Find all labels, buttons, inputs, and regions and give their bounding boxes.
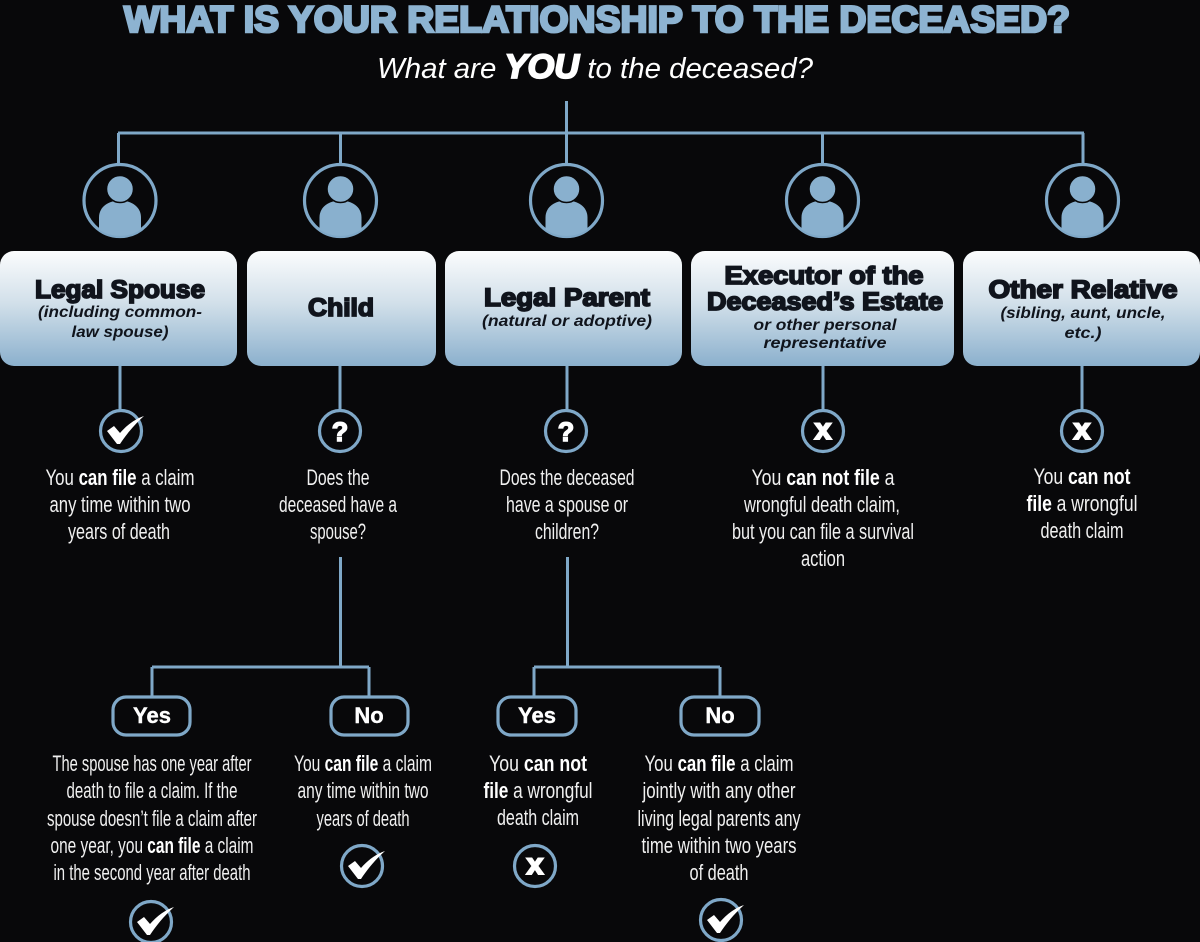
- icon: check child no: [342, 846, 385, 886]
- text: child yes result: in the second year after death: [54, 860, 250, 885]
- text: parent no result: You can file a claim: [644, 751, 794, 776]
- text: other relative result: You can not: [1034, 464, 1131, 489]
- pill: child no: [331, 697, 408, 735]
- panel: legal spouse: Legal Spouse: [35, 276, 205, 304]
- text: other relative result: file a wrongful: [1026, 491, 1138, 516]
- text: child yes result: death to file a claim. If the: [66, 778, 238, 803]
- icon: question child: [320, 410, 360, 452]
- icon: check parent no: [700, 900, 744, 940]
- icon: person executor: [786, 164, 858, 236]
- text: parent no result: living legal parents any: [638, 806, 800, 831]
- text: parent yes result: death claim: [497, 805, 579, 830]
- panel: legal parent: Legal Parent: [484, 284, 651, 312]
- text: parent no result: of death: [690, 860, 748, 885]
- text: other relative result: [1026, 464, 1138, 543]
- pill: parent no: No: [705, 703, 735, 728]
- icon: x parent yes: x: [527, 848, 544, 881]
- text: child no result: You can file a claim: [294, 751, 432, 776]
- icon: check child yes: [130, 902, 174, 942]
- text: executor result: action: [801, 546, 845, 571]
- text: child no result: any time within two: [298, 778, 428, 803]
- panel: executor: or other personal: [754, 317, 897, 334]
- panel: legal parent: (natural or adoptive): [482, 313, 652, 330]
- panel: legal parent: [445, 251, 682, 366]
- text: parent yes result: You can not: [489, 751, 588, 776]
- icon: person other relative: [1046, 164, 1118, 236]
- icon: question parent: [546, 410, 586, 452]
- text: parent yes result: file a wrongful: [484, 778, 592, 803]
- text: child no result: years of death: [316, 806, 410, 831]
- icon: person spouse: [84, 164, 156, 236]
- text: child question: spouse?: [310, 519, 366, 544]
- panel: executor: [691, 251, 954, 366]
- panel: executor: Executor of the: [724, 262, 924, 290]
- text: child question: deceased have a: [279, 492, 398, 517]
- panel: executor: Deceased’s Estate: [707, 288, 943, 316]
- text: spouse result: years of death: [68, 519, 170, 544]
- text: executor result: You can not file a: [752, 465, 895, 490]
- icon: x parent yes: [514, 846, 556, 886]
- text: parent yes result: [484, 751, 592, 830]
- pill: child no: No: [354, 703, 384, 728]
- text: parent no result: [638, 751, 800, 885]
- pill: child yes: [113, 697, 190, 735]
- panel: other relative: Other Relative: [988, 276, 1178, 304]
- text: parent question: have a spouse or: [506, 492, 628, 517]
- text: parent question: [500, 465, 634, 544]
- connector lines: [118, 101, 1084, 697]
- icon: x other relative: [1062, 410, 1102, 452]
- pill: child yes: Yes: [133, 703, 171, 728]
- panel: executor: representative: [764, 335, 887, 352]
- text: executor result: but you can file a survival: [732, 519, 914, 544]
- text: parent question: children?: [535, 519, 599, 544]
- icon: person child: [304, 164, 376, 236]
- icon: question child: ?: [332, 417, 348, 447]
- pill: parent no: [681, 697, 759, 735]
- text: parent no result: time within two years: [642, 833, 796, 858]
- text: child no result: [294, 751, 432, 831]
- panel: legal spouse: (including common-: [38, 304, 202, 321]
- text: parent no result: jointly with any other: [642, 778, 796, 803]
- text: executor result: [732, 465, 914, 571]
- text: child yes result: spouse doesn’t file a claim after: [47, 806, 257, 831]
- title: WHAT IS YOUR RELATIONSHIP TO THE DECEASED?: [124, 0, 1070, 40]
- panel: other relative: [963, 251, 1200, 366]
- text: executor result: wrongful death claim,: [743, 492, 900, 517]
- text: other relative result: death claim: [1040, 518, 1124, 543]
- panel: child: Child: [308, 294, 374, 322]
- subtitle: What are YOU to the deceased?: [377, 48, 814, 86]
- text: child question: [279, 465, 398, 544]
- icon: person parent: [530, 164, 602, 236]
- text: child yes result: The spouse has one year after: [52, 751, 252, 776]
- panel: child: [247, 251, 436, 366]
- icon: x other relative: x: [1074, 413, 1091, 446]
- text: child question: Does the: [306, 465, 370, 490]
- icon: x executor: [802, 410, 844, 452]
- text: child yes result: [47, 751, 257, 885]
- text: spouse result: You can file a claim: [46, 465, 194, 490]
- text: child yes result: one year, you can file a claim: [50, 833, 253, 858]
- icon: x executor: x: [815, 413, 832, 446]
- icon: question parent: ?: [558, 417, 574, 447]
- panel: other relative: etc.): [1064, 325, 1102, 342]
- panel: other relative: (sibling, aunt, uncle,: [1000, 305, 1166, 322]
- pill: parent yes: Yes: [518, 703, 556, 728]
- panel: legal spouse: [0, 251, 237, 366]
- panel: legal spouse: law spouse): [72, 324, 168, 341]
- text: spouse result: [46, 465, 194, 544]
- text: parent question: Does the deceased: [500, 465, 634, 490]
- text: spouse result: any time within two: [50, 492, 190, 517]
- pill: parent yes: [498, 697, 576, 735]
- icon: check spouse: [100, 410, 144, 452]
